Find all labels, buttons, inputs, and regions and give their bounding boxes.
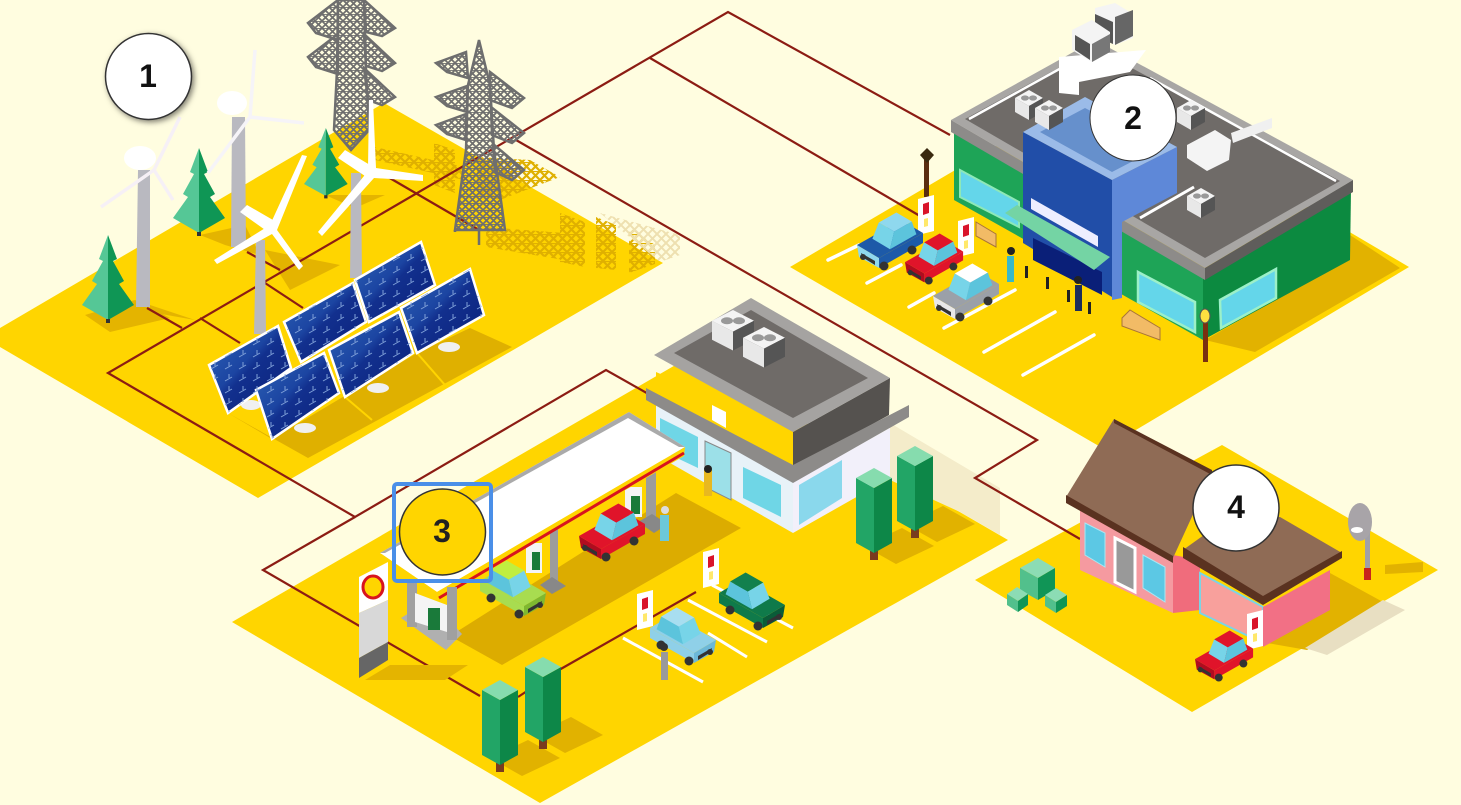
side window <box>1220 269 1276 328</box>
shop shadow <box>890 423 1000 535</box>
number badge 4: 4 <box>1227 489 1245 525</box>
chargers at shopping centre <box>918 195 974 257</box>
number badge 2: 2 <box>1124 100 1142 136</box>
people at station <box>660 465 712 680</box>
window left <box>660 418 698 468</box>
roof stripe <box>1140 187 1194 218</box>
front window <box>1138 272 1195 332</box>
lamp post by building <box>1200 309 1210 362</box>
street light <box>1348 503 1423 580</box>
right wall <box>1263 570 1330 647</box>
connector wall <box>1173 555 1200 613</box>
number badge 3 (selected): 3 <box>433 513 451 549</box>
porch wall <box>1200 573 1263 643</box>
ground plate 3 <box>232 356 1008 803</box>
Shell price sign <box>359 562 468 680</box>
icon: cooling units on roof top <box>1059 3 1146 95</box>
house shadow <box>1267 573 1383 650</box>
roof deck <box>965 48 1340 258</box>
roof units <box>1015 90 1043 120</box>
main roof <box>1066 419 1212 558</box>
hedge cubes <box>1007 558 1067 613</box>
icon: wind turbine 2 <box>208 50 304 247</box>
window centre <box>743 467 781 517</box>
ledge <box>646 388 909 483</box>
car at house <box>1195 631 1253 682</box>
shadow beyond plate <box>1305 600 1405 655</box>
shop right wall <box>793 428 890 533</box>
building: station shop <box>646 298 909 533</box>
ground plate 2 <box>790 85 1409 449</box>
blue entrance top <box>1023 97 1177 180</box>
icon: large pylon <box>308 0 395 150</box>
roof parapet <box>951 40 1353 268</box>
parking bays at shopping centre <box>828 245 1094 375</box>
white roof slab <box>1231 118 1272 143</box>
building: house <box>1066 419 1342 647</box>
panel: service station site <box>232 356 1008 803</box>
bollards <box>1025 266 1091 314</box>
ground plate 4 <box>975 445 1438 712</box>
people at shopping centre <box>1007 247 1082 311</box>
panel: parking and shop site <box>790 85 1409 449</box>
left window <box>960 170 1019 227</box>
door <box>1115 538 1135 592</box>
upper dark side <box>793 378 890 468</box>
icon: wind turbine 3 <box>214 155 307 334</box>
blue entrance front <box>1023 132 1112 297</box>
charger at house <box>1247 610 1263 650</box>
box trees at station <box>482 446 975 776</box>
number badge 4 <box>1193 465 1279 551</box>
window two <box>1143 555 1165 602</box>
number badge 1: 1 <box>139 58 157 94</box>
number badge 2 <box>1090 75 1176 161</box>
right green wall <box>1203 190 1351 340</box>
cars at station <box>480 504 785 666</box>
large roof box <box>1187 130 1231 171</box>
panel cells <box>209 242 484 439</box>
upper windows <box>1031 198 1098 247</box>
parking bays at station <box>623 585 793 682</box>
shop left wall <box>656 405 793 533</box>
right roof <box>1183 515 1342 600</box>
canopy pillars and pumps <box>526 472 668 594</box>
number badge 3 (selected) <box>394 484 491 581</box>
left green wall <box>954 130 1203 340</box>
roof parapet <box>654 298 890 432</box>
power wires <box>108 12 1080 697</box>
door <box>705 441 731 500</box>
trees on plate 1 <box>82 128 348 323</box>
window right <box>799 460 842 525</box>
roof units <box>712 310 754 350</box>
awning <box>1005 205 1110 270</box>
window one <box>1085 523 1105 567</box>
second tower shadow <box>486 213 655 273</box>
panel mounts <box>241 342 460 433</box>
turbine shadows <box>85 195 385 332</box>
chargers at station <box>637 548 719 630</box>
solar array <box>209 242 484 439</box>
sign <box>712 405 726 428</box>
benches <box>976 222 1160 340</box>
roof deck <box>674 310 868 418</box>
left wall <box>1080 510 1173 613</box>
number badge 1 <box>106 34 192 120</box>
panel faces <box>209 242 484 439</box>
ground plate 1 <box>0 103 663 498</box>
lamp post near chargers <box>920 148 934 197</box>
panel: renewable generation site <box>0 103 680 498</box>
front pump island <box>401 583 462 650</box>
building: shopping centre <box>951 40 1353 340</box>
off-plate tower shadow <box>600 213 680 262</box>
upper yellow fascia <box>656 372 793 470</box>
canopy <box>380 412 685 598</box>
icon: near pylon <box>436 40 524 245</box>
panel: home site <box>975 445 1438 712</box>
blue entrance side <box>1112 147 1177 300</box>
forecourt shadow <box>450 493 741 665</box>
building shadow <box>1205 235 1400 352</box>
solar panel ground shadows <box>228 328 512 458</box>
icon: wind turbine 4 <box>318 100 423 278</box>
cars at shopping centre <box>857 212 999 322</box>
doors <box>1033 238 1102 295</box>
first tower shadow <box>375 143 560 200</box>
icon: wind turbine 1 <box>101 117 180 307</box>
